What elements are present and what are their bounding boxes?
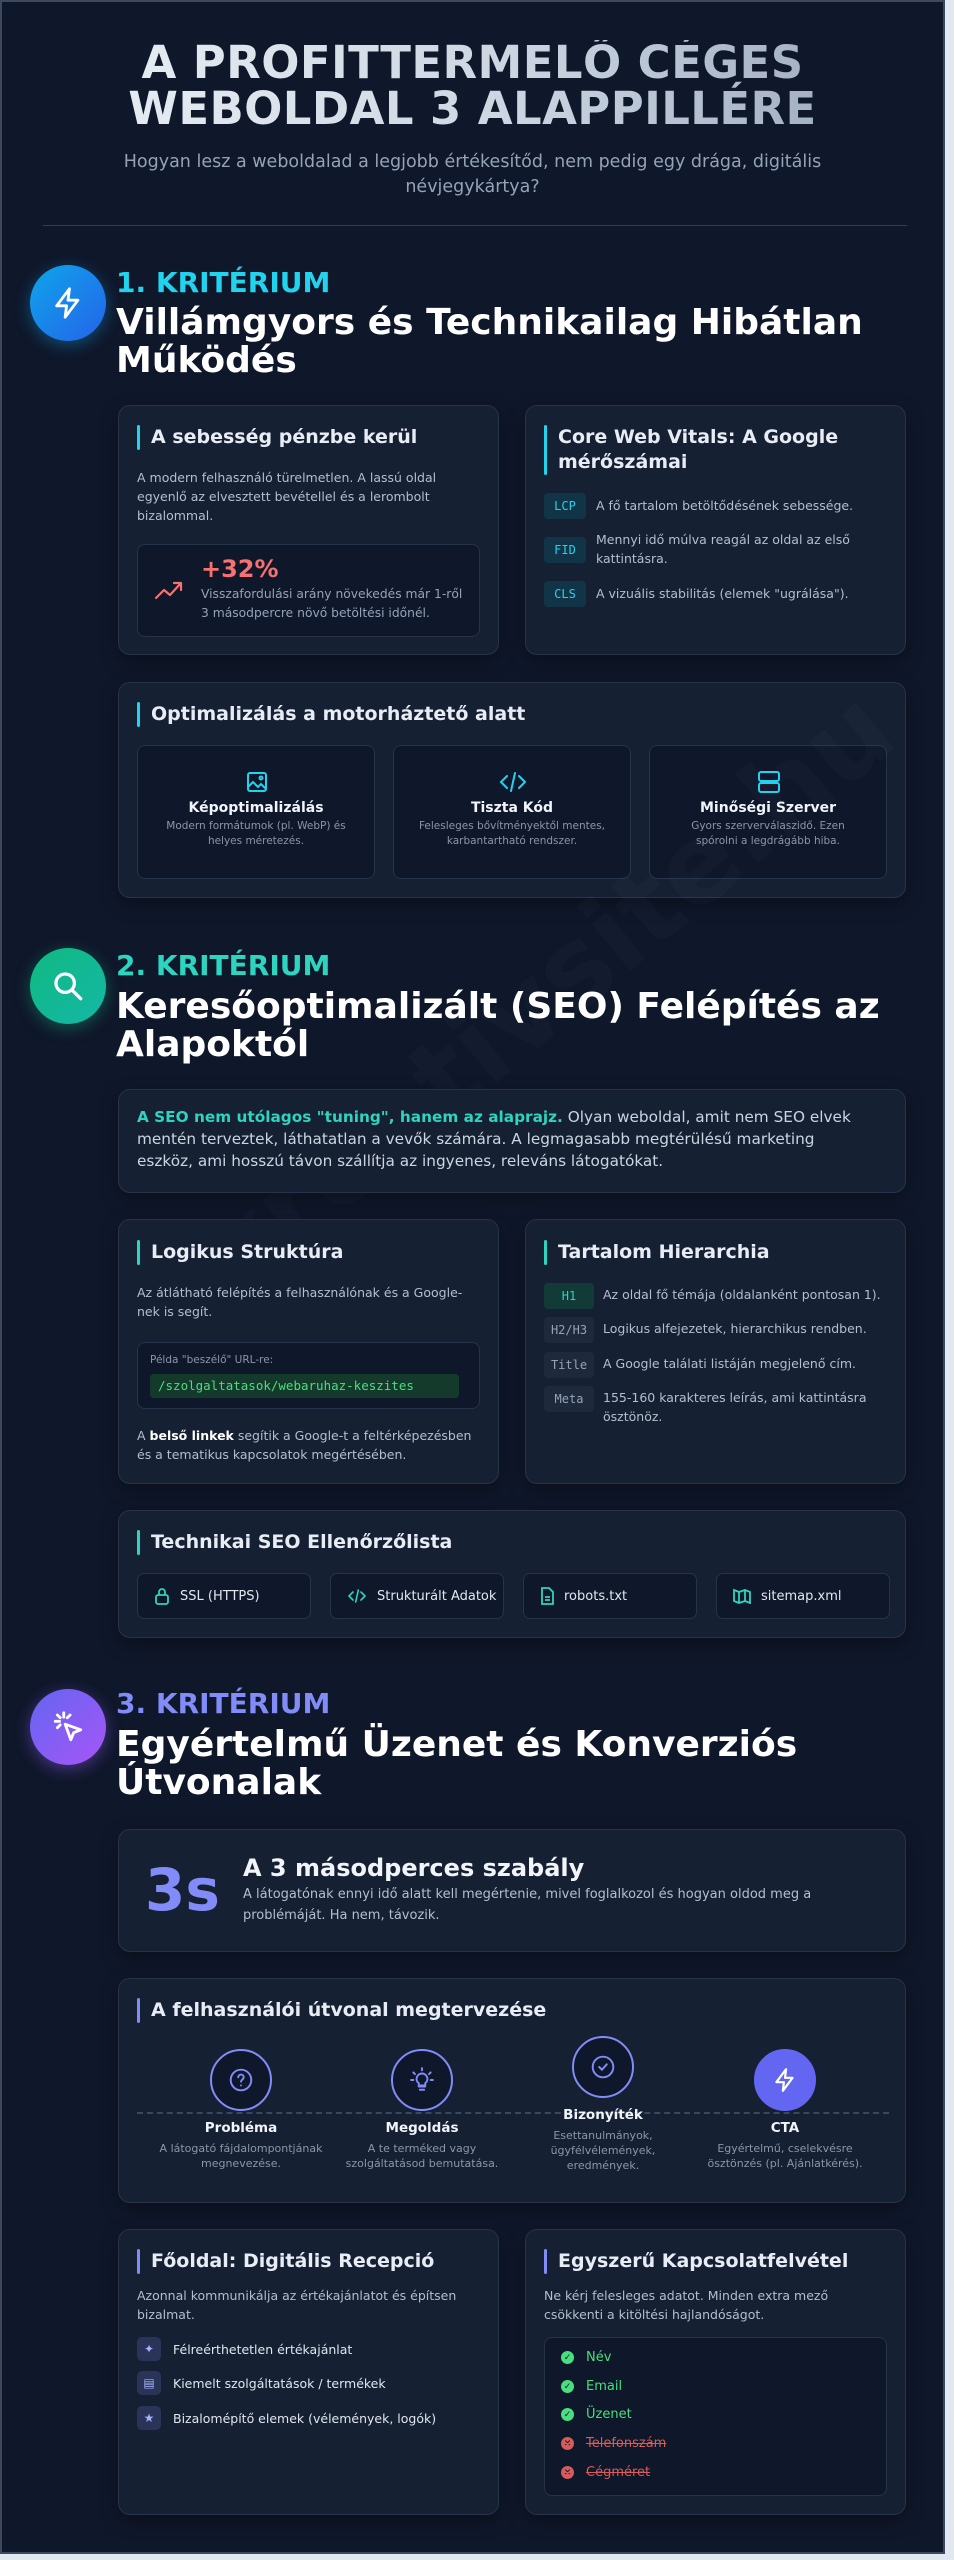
panel: content hierarchy: H2/H3: [551, 1323, 587, 1337]
panel: optimization: Optimalizálás a motorháztető alatt: [151, 703, 525, 725]
step: proof: [551, 2036, 655, 2172]
panel: core web vitals: Mennyi idő múlva reagál az oldal az első kattintásra.: [596, 532, 850, 566]
stat callout: [137, 544, 480, 637]
form fields: [544, 2337, 887, 2496]
panel: logical structure: [118, 1219, 499, 1484]
step: solution: A te terméked vagy szolgáltatásod bemutatása.: [346, 2142, 498, 2170]
panel: speed costs money: [118, 405, 499, 655]
panel: content hierarchy: Logikus alfejezetek, hierarchikus rendben.: [603, 1321, 867, 1336]
title: WEBOLDAL 3 ALAPPILLÉRE: [128, 82, 817, 135]
section 1 header: [22, 260, 863, 381]
panel: core web vitals: FID: [554, 543, 576, 557]
panel: speed costs money: A sebesség pénzbe kerül: [151, 426, 417, 448]
panel: SEO intro: A SEO nem utólagos "tuning", hanem az alaprajz. Olyan weboldal, amit nem SEO elvek mentén terveztek, láthatatlan a vevők számára. A legmagasabb megtérülésű marketing eszköz, ami hosszú távon szállítja az ingyenes, releváns látogatókat.: [137, 1108, 851, 1170]
panel: simple contact: Ne kérj felesleges adatot. Minden extra mező csökkenti a kitöltési hajlandóságot.: [544, 2288, 828, 2322]
panel: homepage: Főoldal: Digitális Recepció: [151, 2250, 434, 2272]
panel: core web vitals: Core Web Vitals: A Google mérőszámai: [558, 426, 838, 473]
panel: SEO intro: [118, 1089, 906, 1193]
clean code: Felesleges bővítményektől mentes,: [419, 820, 605, 832]
panel: logical structure: A belső linkek segítik a Google-t a feltérképezésben és a tematikus kapcsolatok megértésében.: [137, 1428, 471, 1462]
panel: simple contact: [525, 2229, 906, 2515]
form fields: ✓: [564, 2382, 571, 2392]
step: problem: A látogató fájdalompontjának megnevezése.: [160, 2142, 322, 2170]
panel: user journey: A felhasználói útvonal megtervezése: [151, 1999, 546, 2021]
step: CTA: CTA: [771, 2120, 799, 2136]
clean code: [393, 745, 631, 879]
clean code: Tiszta Kód: [471, 800, 553, 816]
panel: 3 second rule: 3s: [145, 1856, 220, 1924]
form fields: ✓: [564, 2410, 571, 2420]
panel: optimization: [118, 682, 906, 898]
panel: homepage: Bizalomépítő elemek (vélemények, logók): [173, 2410, 436, 2426]
kicker: 1. KRITÉRIUM: [116, 266, 330, 299]
title: [2, 40, 943, 132]
panel: user journey: [118, 1978, 906, 2203]
panel: homepage: Azonnal kommunikálja az értékajánlatot és építsen bizalmat.: [137, 2288, 456, 2322]
kicker: 3. KRITÉRIUM: [116, 1687, 330, 1720]
panel: homepage: ✦: [144, 2342, 154, 2356]
clean code: karbantartható rendszer.: [447, 835, 577, 847]
server: [649, 745, 887, 879]
panel: content hierarchy: Az oldal fő témája (oldalanként pontosan 1).: [603, 1287, 881, 1302]
step: proof: Esettanulmányok, ügyfélvélemények, eredmények.: [551, 2129, 655, 2172]
image optimisation: [137, 745, 375, 879]
image optimisation: Modern formátumok (pl. WebP) és: [166, 820, 346, 832]
panel: content hierarchy: Meta: [555, 1392, 583, 1406]
panel: homepage: Félreérthetetlen értékajánlat: [173, 2342, 352, 2356]
kicker: 2. KRITÉRIUM: [116, 949, 330, 982]
subtitle: Hogyan lesz a weboldalad a legjobb értékesítőd, nem pedig egy drága, digitális névjegykártya?: [124, 152, 821, 197]
step: solution: Megoldás: [386, 2120, 458, 2136]
panel: content hierarchy: 155-160 karakteres leírás, ami kattintásra ösztönöz.: [603, 1390, 866, 1424]
panel: homepage: [118, 2229, 499, 2515]
panel: content hierarchy: Tartalom Hierarchia: [558, 1241, 770, 1263]
panel: logical structure: Logikus Struktúra: [151, 1241, 343, 1263]
server: spórolni a legdrágább hiba.: [696, 835, 840, 847]
form fields: Üzenet: [586, 2407, 632, 2422]
icon: lightning: [30, 265, 106, 341]
form fields: ✕: [564, 2468, 571, 2478]
panel: simple contact: Egyszerű Kapcsolatfelvétel: [558, 2250, 848, 2272]
panel: content hierarchy: [525, 1219, 906, 1484]
watermark: kreativsite.hu: [172, 665, 918, 1320]
panel: technical SEO checklist: [118, 1510, 906, 1638]
panel: 3 second rule: A 3 másodperces szabály: [243, 1854, 584, 1882]
section title: Keresőoptimalizált (SEO) Felépítés az Alapoktól: [116, 986, 880, 1065]
panel: content hierarchy: Title: [551, 1358, 587, 1372]
panel: speed costs money: A modern felhasználó türelmetlen. A lassú oldal egyenlő az elvesztett bevétellel és a lerombolt bizalommal.: [137, 470, 436, 523]
url example: /szolgaltatasok/webaruhaz-keszites: [158, 1378, 414, 1393]
panel: homepage: ★: [144, 2411, 154, 2425]
url example: [137, 1342, 480, 1409]
panel: technical SEO checklist: Strukturált Adatok: [377, 1588, 496, 1604]
panel: technical SEO checklist: sitemap.xml: [761, 1588, 841, 1604]
icon: search: [30, 948, 106, 1024]
panel: content hierarchy: A Google találati listáján megjelenő cím.: [603, 1356, 856, 1371]
panel: core web vitals: LCP: [554, 499, 576, 513]
form fields: ✕: [564, 2438, 571, 2448]
panel: core web vitals: A fő tartalom betöltődésének sebessége.: [596, 498, 853, 513]
image optimisation: helyes méretezés.: [208, 835, 304, 847]
stat callout: +32%: [201, 555, 279, 583]
form fields: ✓: [564, 2352, 571, 2362]
panel: 3 second rule: [118, 1829, 906, 1952]
step: proof: Bizonyíték: [563, 2107, 643, 2123]
panel: technical SEO checklist: Technikai SEO Ellenőrzőlista: [151, 1531, 452, 1553]
step: problem: Probléma: [205, 2120, 277, 2136]
form fields: Telefonszám: [586, 2436, 666, 2451]
title: A PROFITTERMELŐ CÉGES: [141, 36, 804, 89]
form fields: Cégméret: [586, 2465, 650, 2480]
panel: content hierarchy: H1: [562, 1289, 576, 1303]
panel: core web vitals: [525, 405, 906, 655]
panel: logical structure: Az átlátható felépítés a felhasználónak és a Google-nek is segít.: [137, 1285, 462, 1319]
panel: technical SEO checklist: robots.txt: [564, 1588, 627, 1604]
form fields: Név: [586, 2350, 611, 2365]
stat callout: Visszafordulási arány növekedés már 1-ről 3 másodpercre növő betöltési időnél.: [201, 587, 462, 620]
panel: 3 second rule: A látogatónak ennyi idő alatt kell megértenie, mivel foglalkozol és hogyan oldod meg a problémáját. Ha nem, távozik.: [243, 1887, 811, 1923]
icon: cursor click: [30, 1689, 106, 1765]
image optimisation: Képoptimalizálás: [188, 800, 324, 816]
section title: Egyértelmű Üzenet és Konverziós Útvonalak: [116, 1724, 797, 1803]
panel: technical SEO checklist: SSL (HTTPS): [180, 1588, 260, 1604]
panel: homepage: ▤: [143, 2376, 155, 2390]
server: Gyors szerverválaszidő. Ezen: [691, 820, 845, 832]
form fields: Email: [586, 2379, 622, 2394]
panel: homepage: Kiemelt szolgáltatások / termékek: [173, 2376, 386, 2390]
step: problem: [160, 2049, 322, 2170]
step: solution: [346, 2049, 498, 2170]
server: Minőségi Szerver: [700, 800, 836, 816]
url example: Példa "beszélő" URL-re:: [150, 1354, 273, 1366]
section 2 header: [22, 944, 880, 1065]
journey steps: [160, 2036, 863, 2172]
step: CTA: Egyértelmű, cselekvésre ösztönzés (pl. Ajánlatkérés).: [707, 2142, 863, 2170]
panel: core web vitals: CLS: [554, 587, 576, 601]
section 3 header: [20, 1684, 797, 1803]
step: CTA: [707, 2049, 863, 2170]
panel: core web vitals: A vizuális stabilitás (elemek "ugrálása").: [596, 586, 849, 601]
section title: Villámgyors és Technikailag Hibátlan Működés: [116, 302, 863, 381]
